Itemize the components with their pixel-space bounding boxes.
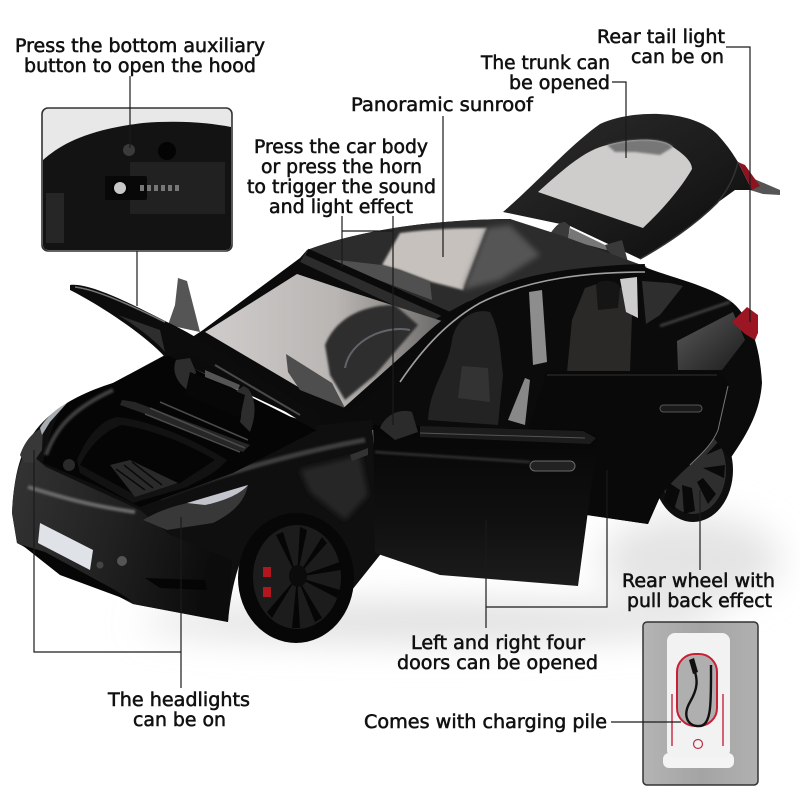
leader line: charging pile <box>611 721 681 723</box>
label: trunk: The trunk can <box>480 53 610 74</box>
car: license plate <box>38 523 93 570</box>
charging pile lightning icon <box>694 740 702 748</box>
leader line: trunk <box>612 82 626 158</box>
ground shadow <box>140 515 780 640</box>
charging pile body <box>667 633 730 758</box>
car: frunk tub <box>77 417 227 503</box>
car: fog light <box>96 556 127 568</box>
car: steering and seat through glass <box>325 305 418 400</box>
label: hood button: Press the bottom auxiliary <box>15 36 265 57</box>
car: hood strut knob <box>63 459 75 471</box>
inset: label plate <box>130 162 225 214</box>
car: front wheel hub <box>289 565 307 587</box>
car: base silhouette <box>165 219 762 459</box>
car: red brake calipers <box>263 567 271 597</box>
car: front body <box>12 355 380 622</box>
inset: switch markings <box>140 185 180 191</box>
car: rear headrest <box>596 281 620 310</box>
car: front door <box>373 411 598 586</box>
label: headlights: can be on <box>133 710 226 731</box>
inset: car underside <box>43 122 231 250</box>
label: trunk: be opened <box>509 73 610 94</box>
car: b pillar <box>529 290 547 365</box>
car: frunk opening <box>43 355 317 507</box>
car: rear seat <box>567 283 632 372</box>
inset: hole <box>158 142 176 160</box>
car: rear wheel <box>653 418 733 522</box>
label: panoramic sunroof: Panoramic sunroof <box>351 95 534 116</box>
car: door opening interior <box>395 271 642 430</box>
leader line: doors <box>486 470 607 628</box>
car: lower sill between doors <box>560 470 665 524</box>
label: rear wheel <box>622 571 775 612</box>
car: side repeater <box>350 448 368 461</box>
car: front bumper <box>12 450 232 622</box>
label: hood button: button to open the hood <box>24 56 256 77</box>
car: rear quarter window and panel <box>642 281 745 370</box>
leader line: tail light <box>726 47 750 322</box>
label: rear tail light: Rear tail light <box>597 27 725 48</box>
leader line: horn and body <box>342 216 393 425</box>
charging pile base <box>663 753 734 768</box>
car: left headlight <box>20 403 67 463</box>
car: hood struts <box>174 358 255 432</box>
leader line: sunroof <box>442 116 444 257</box>
inset: auxiliary button <box>123 144 135 156</box>
car: front wheel <box>238 513 354 643</box>
label: doors: doors can be opened <box>397 653 598 674</box>
leader line: rear wheel <box>699 490 701 570</box>
car: bumper highlight <box>28 487 135 512</box>
inset: switch slider <box>105 176 147 200</box>
inset: charging pile photo <box>643 622 758 785</box>
car: a pillar and roof rail <box>345 268 645 412</box>
car: fender crease highlight <box>160 440 365 497</box>
label: trunk <box>480 53 610 94</box>
car: right headlight <box>143 485 248 530</box>
car: trunk hinges <box>502 222 628 262</box>
label: rear wheel: Rear wheel with <box>622 571 775 592</box>
label: hood button <box>15 36 265 77</box>
car: front seat <box>428 311 503 425</box>
car: open hood <box>70 285 322 430</box>
car: rear door <box>528 371 728 524</box>
car: door frame reflection <box>508 378 530 425</box>
car: fender reflection <box>300 455 368 520</box>
car: roof and panoramic sunroof <box>300 219 647 322</box>
car: frunk tub well <box>80 425 215 495</box>
label: doors <box>397 633 598 674</box>
car: cowl ribs <box>120 400 250 452</box>
model car <box>12 114 780 643</box>
label: sound and light: and light effect <box>269 197 413 218</box>
label: sound and light: Press the car body <box>254 137 428 158</box>
label: doors: Left and right four <box>411 633 585 654</box>
car: fender inner rib <box>46 390 113 455</box>
car: dashboard <box>286 354 345 408</box>
label: rear tail light <box>597 27 725 68</box>
car: tail light <box>732 307 758 340</box>
charging pile side stripes <box>672 694 723 746</box>
label: headlights <box>107 690 250 731</box>
car: lower grille <box>22 545 133 602</box>
label: rear wheel: pull back effect <box>627 591 772 612</box>
car: frunk floor ribs <box>110 460 178 497</box>
inset: border <box>643 622 758 785</box>
car: front wheel spokes <box>267 527 341 628</box>
label: sound and light: to trigger the sound <box>247 177 436 198</box>
label: headlights: The headlights <box>107 690 250 711</box>
leader line: hood button <box>129 76 131 148</box>
car: fog lamp area <box>145 578 207 590</box>
charging pile cable <box>686 662 711 726</box>
inset: border <box>42 108 232 251</box>
car: far side door behind hood <box>168 278 200 332</box>
charging pile red frame <box>677 654 717 726</box>
inset: tire <box>46 193 64 243</box>
car: windshield <box>205 274 445 408</box>
inset: screw <box>113 181 127 195</box>
car: rear window reflection <box>620 277 638 318</box>
label: rear tail light: can be on <box>631 47 724 68</box>
leader line: headlights <box>34 450 181 688</box>
car: open trunk lid <box>503 114 780 259</box>
charging pile plug <box>689 658 698 674</box>
label: charging pile: Comes with charging pile <box>364 712 607 733</box>
leader line: inset to hood <box>136 251 138 306</box>
label: sound and light <box>247 137 436 218</box>
car: front seat cushion <box>458 366 490 402</box>
inset: hood button photo <box>42 108 232 251</box>
label: sound and light: or press the horn <box>261 157 422 178</box>
